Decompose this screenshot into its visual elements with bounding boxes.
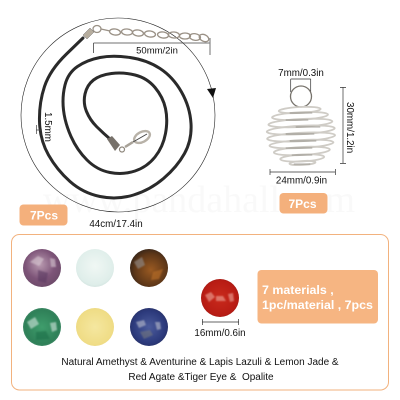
bead: tiger eye	[130, 249, 168, 287]
dimension: pendant height: 30mm/1.2in	[344, 102, 355, 153]
badge: 7Pcs pendant	[280, 193, 328, 214]
caption: materials list	[61, 357, 339, 383]
leather cord	[39, 38, 191, 198]
cord end cap	[83, 28, 94, 39]
watermark: www.pandahall.com	[43, 179, 355, 221]
dimension: chain 50mm	[94, 38, 210, 56]
dimension: bead diameter: 16mm/0.6in	[194, 328, 246, 339]
bead: aventurine	[23, 308, 61, 346]
caption: materials list: Natural Amethyst & Aventurine & Lapis Lazuli & Lemon Jade &	[61, 357, 339, 368]
dimension: pendant width: 24mm/0.9in	[276, 176, 327, 186]
bead: opalite	[76, 249, 114, 287]
callout: materials: 1pc/material , 7pcs	[262, 298, 373, 312]
wire spiral	[266, 105, 337, 167]
bead: red agate	[201, 279, 239, 317]
bead: lapis lazuli	[130, 308, 168, 346]
badge: 7Pcs pendant: 7Pcs	[288, 197, 317, 211]
dimension: cord thickness	[36, 112, 53, 142]
badge: 7Pcs necklace	[20, 204, 68, 226]
bead: lemon jade	[76, 308, 114, 346]
length measure circle	[21, 18, 216, 212]
caption: materials list: Red Agate &Tiger Eye & Opalite	[128, 372, 274, 383]
callout: materials	[258, 270, 378, 324]
dimension: ring width: 7mm/0.3in	[278, 68, 324, 79]
bead: amethyst	[23, 249, 61, 287]
panel: gemstone beads	[12, 234, 388, 390]
dimension: bead diameter	[194, 319, 246, 339]
lobster clasp	[107, 129, 152, 152]
dimension: cord thickness: 1.5mm	[42, 112, 53, 142]
label: length: 44cm/17.4in	[89, 219, 143, 230]
badge: 7Pcs necklace: 7Pcs	[30, 208, 58, 222]
chain extender	[93, 26, 210, 43]
dimension: chain 50mm: 50mm/2in	[136, 46, 178, 56]
callout: materials: 7 materials ,	[262, 283, 334, 297]
spring cage pendant	[266, 68, 355, 186]
pendant ring	[290, 86, 312, 107]
necklace group	[21, 18, 216, 230]
